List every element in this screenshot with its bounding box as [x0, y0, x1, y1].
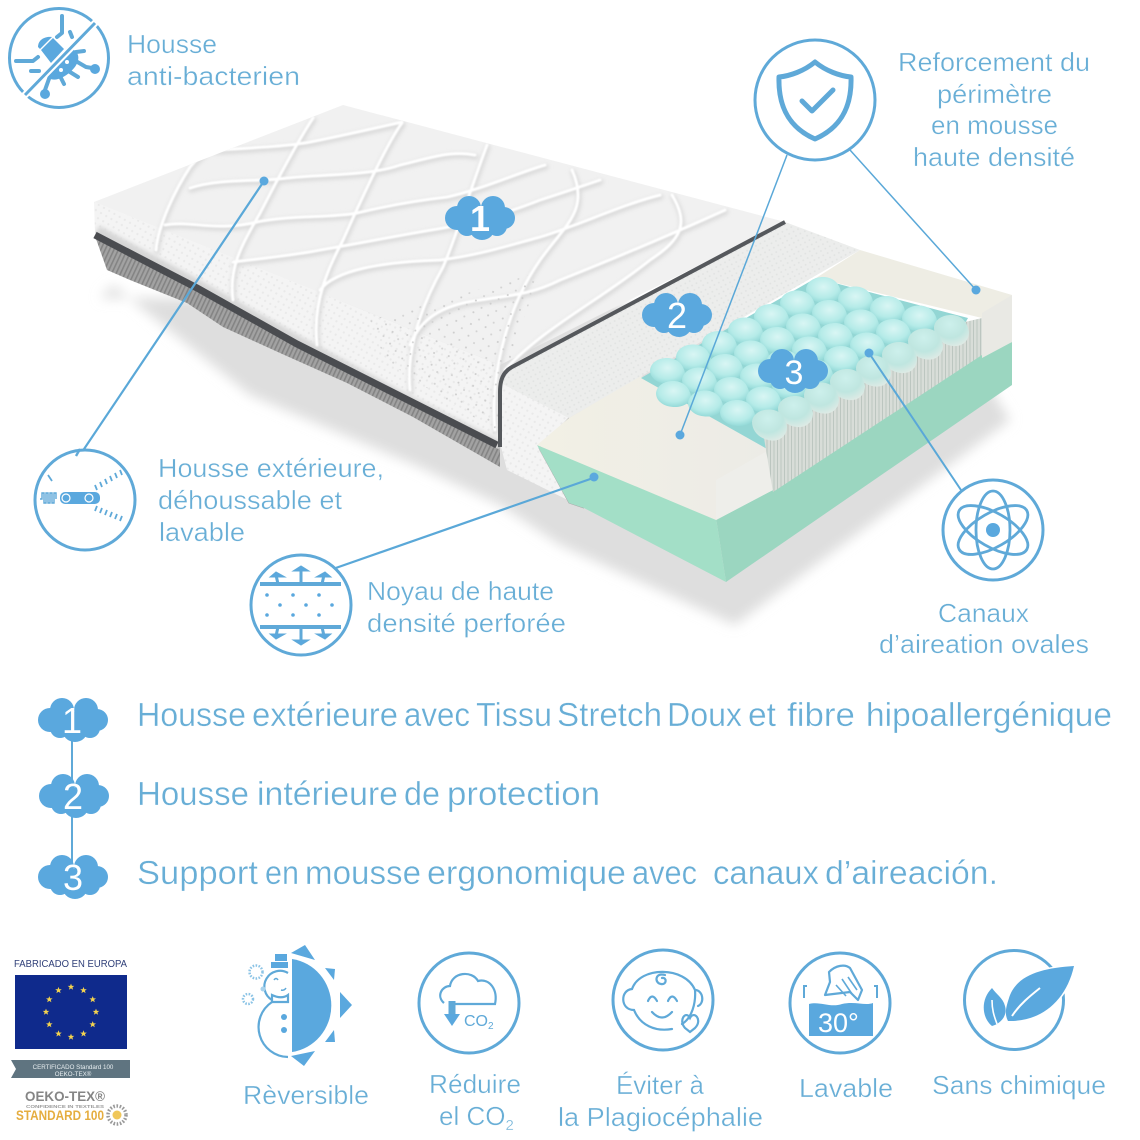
label: densité perforée	[367, 608, 566, 638]
numbered list	[38, 696, 1112, 899]
item 1: et	[748, 696, 776, 733]
connector line	[71, 720, 73, 877]
perforations	[370, 272, 540, 430]
icon: atom	[943, 480, 1043, 580]
certificate ribbon	[11, 1060, 130, 1078]
item 2: intérieure	[257, 775, 398, 812]
line: perimeter to shield icon	[676, 155, 787, 440]
label: 2	[505, 1117, 514, 1134]
label: Noyau de haute	[367, 576, 554, 606]
dark zip band	[95, 235, 497, 445]
item 3: en	[265, 854, 299, 891]
label: Rèversible	[243, 1080, 369, 1110]
cream perimeter, top and front	[537, 376, 773, 520]
label: Lavable	[799, 1073, 893, 1103]
item 1: hipoallergénique	[866, 696, 1112, 733]
cloud 3: 3	[785, 354, 803, 392]
label: Réduire	[429, 1069, 521, 1099]
feature: avoid plagiocephaly	[558, 950, 763, 1132]
cloud 2: 2	[667, 295, 687, 336]
air-channel ribbed wall	[763, 318, 982, 492]
label	[367, 576, 566, 638]
label	[879, 598, 1089, 659]
item 3: d’aireación.	[825, 854, 998, 891]
line: core to perforated icon	[330, 472, 598, 570]
icon: shield	[755, 40, 875, 160]
callout: anti-bacterial cover	[10, 8, 300, 108]
icon: wash basin 30 degrees: 30°	[818, 1008, 859, 1038]
icon: perforated foam	[251, 555, 351, 655]
floor shadow	[100, 285, 1010, 625]
label: Sans chimique	[932, 1070, 1106, 1100]
item 3: canaux	[713, 854, 819, 891]
item 3: avec	[632, 854, 697, 891]
outer cover: side wall	[94, 202, 500, 446]
cloud 3	[758, 349, 828, 393]
item 1: Doux	[667, 696, 742, 733]
label	[158, 453, 384, 547]
item 1: extérieure	[252, 696, 398, 733]
quilting seams	[156, 118, 726, 432]
cloud 1	[445, 196, 515, 240]
label: Housse extérieure,	[158, 453, 384, 483]
leader lines	[78, 150, 980, 570]
item 3: Support	[137, 854, 258, 891]
item 3: 3	[63, 857, 83, 898]
item 1: Housse	[137, 696, 246, 733]
label: déhoussable et	[158, 485, 343, 515]
line: channels to atom icon	[864, 348, 961, 490]
label: en mousse	[931, 110, 1058, 140]
item 1: 1	[62, 700, 82, 741]
label: Housse	[127, 29, 217, 59]
label: el CO	[439, 1101, 505, 1131]
outer cover: quilted top	[94, 105, 785, 448]
icon: cloud CO2: CO	[464, 1013, 488, 1030]
label	[898, 47, 1090, 172]
label: anti-bacterien	[127, 61, 300, 91]
item 3	[38, 854, 998, 899]
item 2	[39, 774, 600, 818]
line: outer cover to zip icon	[78, 176, 268, 458]
certifications	[11, 958, 130, 1124]
air-channel bumps	[650, 277, 969, 441]
inner cover	[500, 222, 860, 508]
OEKO-TEX logo: STANDARD 100	[16, 1108, 104, 1123]
OEKO-TEX logo	[16, 1089, 126, 1124]
cloud 2	[642, 293, 712, 337]
icon: crossed-out bacteria	[10, 8, 108, 108]
icon: zip	[35, 449, 135, 550]
green base, front face	[537, 445, 726, 582]
cream perimeter, back strip	[816, 250, 1012, 318]
certificate ribbon: OEKO-TEX®	[55, 1071, 92, 1078]
icon: cloud CO2: 2	[488, 1021, 494, 1032]
item 3: ergonomique	[427, 854, 626, 891]
cloud markers on mattress	[445, 196, 828, 393]
item 1	[38, 696, 1112, 742]
edge softening between top and side	[96, 232, 500, 448]
item 1: fibre	[787, 696, 855, 733]
air-channel grid base	[641, 278, 968, 450]
feature: reversible	[243, 945, 369, 1110]
item 1: Stretch	[557, 696, 662, 733]
item 2: protection	[447, 775, 600, 812]
icon: cloud CO2	[419, 953, 519, 1053]
item 2: de	[404, 775, 440, 812]
callout: oval air channels	[879, 480, 1089, 659]
feature: chemical free	[932, 950, 1106, 1100]
icon: baby face	[613, 950, 713, 1050]
certificate ribbon: CERTIFICADO Standard 100	[33, 1064, 114, 1071]
callout: perforated core	[251, 555, 566, 655]
label: haute densité	[913, 142, 1075, 172]
label	[558, 1070, 763, 1132]
label: Éviter à	[616, 1070, 705, 1100]
OEKO-TEX logo: CONFIDENCE IN TEXTILES	[26, 1104, 104, 1109]
label: Reforcement du	[898, 47, 1090, 77]
icon: leaves	[964, 950, 1074, 1050]
item 2: Housse	[137, 775, 249, 812]
label: Canaux	[938, 598, 1029, 628]
cream perimeter, fold shading	[716, 450, 773, 520]
label	[127, 29, 300, 91]
feature: reduce CO2	[419, 953, 521, 1134]
green base, right face	[716, 342, 1012, 582]
icon: wash basin 30 degrees	[790, 953, 890, 1053]
cream perimeter, right side	[982, 295, 1012, 358]
mattress illustration	[94, 105, 1012, 625]
label	[429, 1069, 521, 1134]
item 2: 2	[63, 776, 83, 817]
label: lavable	[159, 517, 245, 547]
OEKO-TEX logo: OEKO-TEX®	[25, 1089, 105, 1104]
feature: washable	[790, 953, 893, 1103]
callout: removable washable cover	[35, 449, 384, 550]
line: back perimeter to shield icon	[850, 150, 980, 294]
item 1: avec	[404, 696, 470, 733]
callout: reinforced perimeter	[755, 40, 1090, 172]
cloud 1: 1	[470, 198, 490, 239]
label: périmètre	[937, 79, 1052, 109]
heading: made in Europe: FABRICADO EN EUROPA	[14, 958, 127, 970]
outer cover: grey knit underside	[95, 236, 500, 467]
item 1: Tissu	[476, 696, 552, 733]
label: d’aireation ovales	[879, 629, 1089, 659]
EU flag	[15, 975, 127, 1049]
icon: half snowman half sun	[243, 945, 352, 1066]
item 3: mousse	[305, 854, 421, 891]
label: la Plagiocéphalie	[558, 1102, 763, 1132]
foam core	[537, 250, 1012, 582]
